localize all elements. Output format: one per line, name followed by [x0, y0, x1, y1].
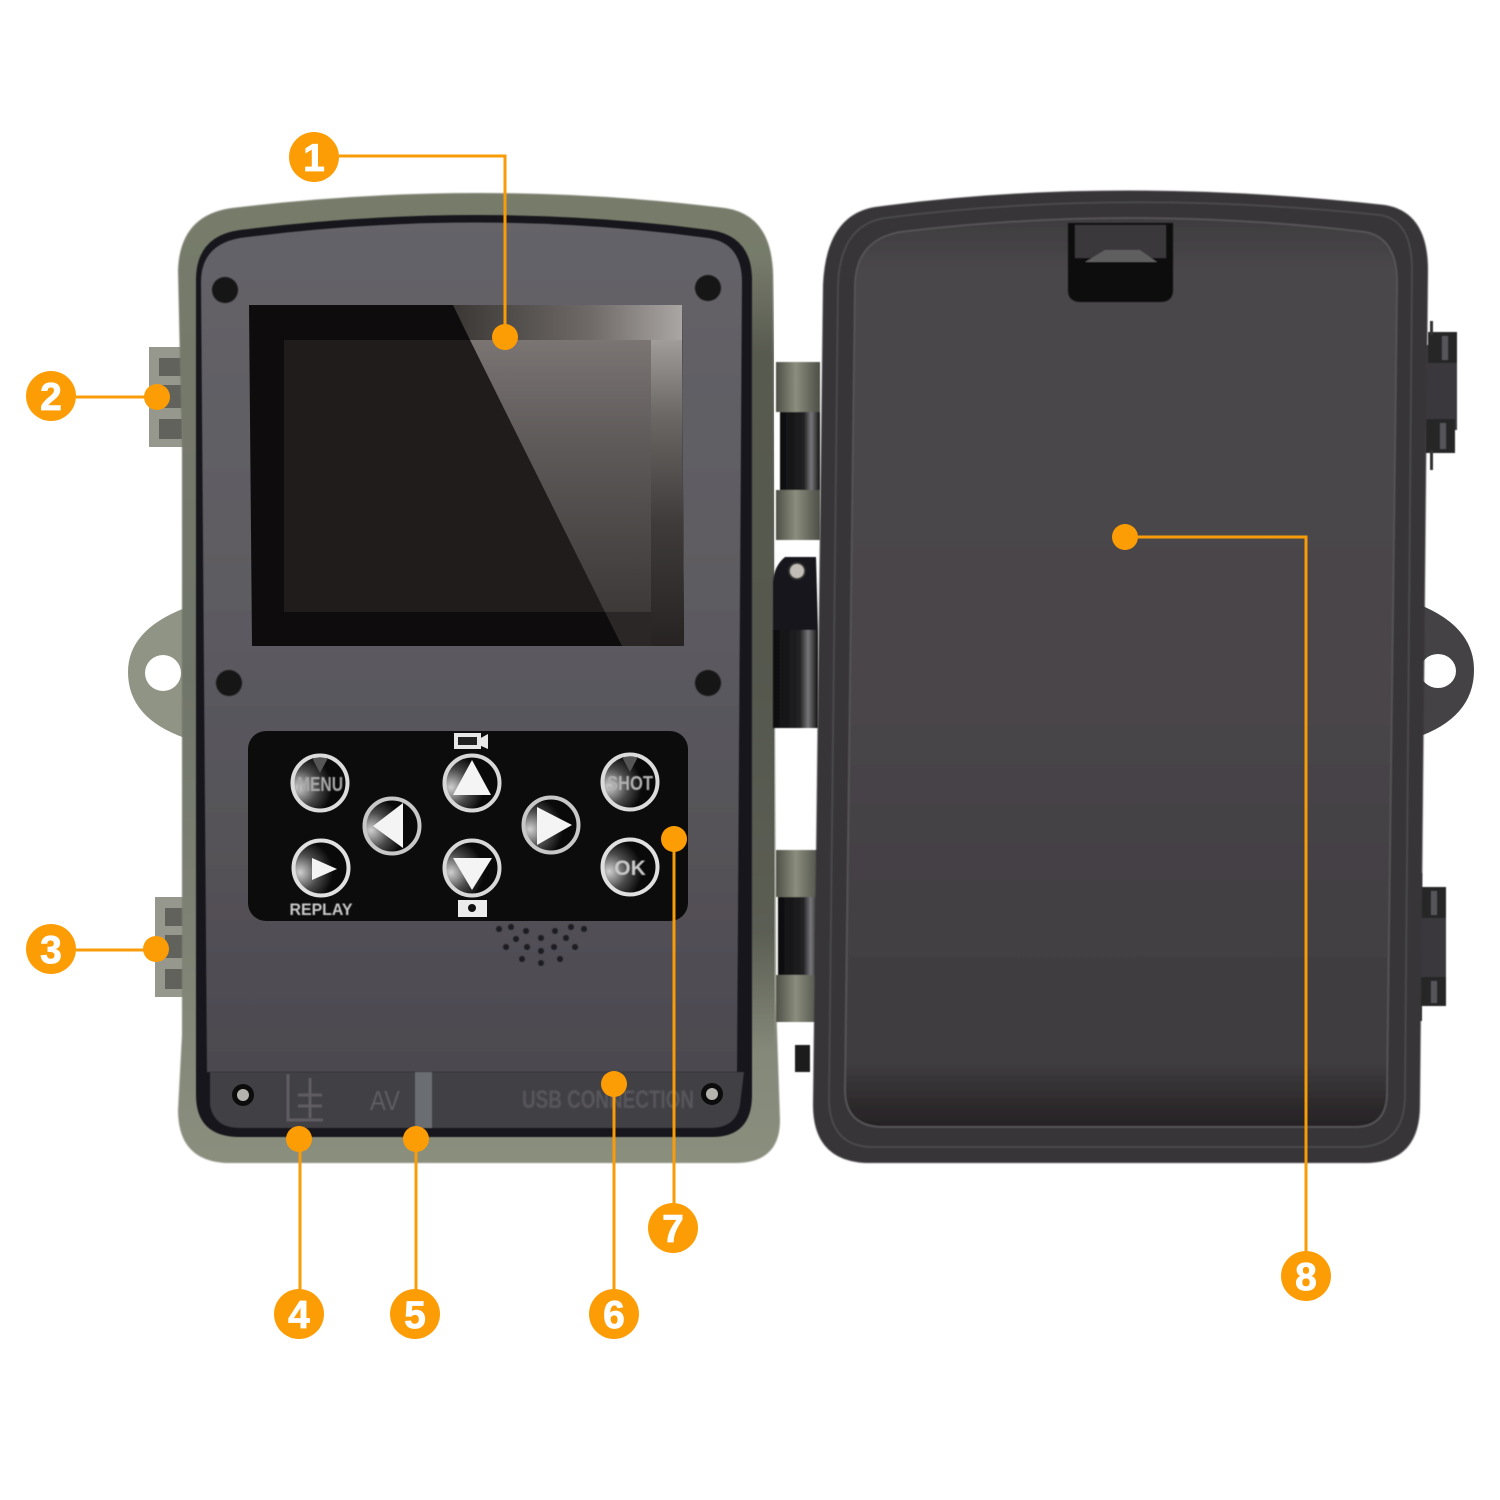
grey inner panel — [201, 222, 742, 1072]
button: right arrow — [524, 798, 578, 852]
hinges — [773, 362, 820, 1072]
callout 2: upper latch: 2 — [40, 376, 62, 419]
callout 2: upper latch — [26, 371, 170, 421]
panel screws — [212, 275, 721, 696]
button: replay — [294, 840, 348, 896]
TF card symbol — [288, 1074, 323, 1120]
LCD screen — [249, 305, 684, 646]
callout 4: card slot — [274, 1126, 324, 1339]
callout 6: USB port — [589, 1071, 639, 1339]
shaded right side of the shell — [752, 260, 774, 1050]
button: ok: OK — [614, 857, 646, 880]
button: ok — [602, 840, 658, 894]
callout 8: battery door — [1112, 524, 1331, 1301]
callout 5: AV port: 5 — [404, 1294, 426, 1337]
icon: video camera — [456, 734, 488, 749]
latch, upper left — [149, 347, 183, 447]
outer door shell — [813, 190, 1428, 1163]
screw, strip right — [701, 1083, 723, 1105]
battery door tab notch — [1068, 223, 1173, 302]
button: shot: SHOT — [607, 773, 653, 795]
callout 1: screen — [289, 132, 518, 350]
mounting ear, right — [1415, 603, 1474, 738]
button: up arrow — [444, 756, 500, 810]
button: shot — [602, 754, 658, 810]
USB connection label: USB CONNECTION — [522, 1086, 694, 1114]
mounting ear, left — [128, 608, 185, 738]
callout 4: card slot: 4 — [288, 1294, 310, 1337]
callout 7: keypad: 7 — [662, 1208, 684, 1251]
icon: photo camera — [458, 900, 487, 917]
callout 3: lower latch — [26, 924, 169, 974]
callout 5: AV port — [390, 1126, 440, 1339]
latch, upper right — [1422, 321, 1457, 470]
callout 1: screen: 1 — [303, 137, 325, 180]
latch, lower right — [1412, 873, 1446, 1021]
inner tray — [845, 218, 1397, 1127]
button: down arrow — [444, 840, 500, 896]
outer rim highlight — [829, 202, 1412, 1147]
callout 3: lower latch: 3 — [40, 929, 62, 972]
replay label: REPLAY — [290, 900, 353, 919]
callout 8: battery door: 8 — [1295, 1256, 1317, 1299]
black gasket — [196, 215, 752, 1137]
keypad — [248, 731, 688, 921]
port cover divider — [415, 1072, 432, 1128]
camera door, right half — [813, 190, 1474, 1163]
outer olive shell — [178, 193, 780, 1163]
AV label: AV — [370, 1085, 400, 1116]
port cover strip — [210, 1072, 744, 1128]
callout 7: keypad — [648, 826, 698, 1253]
button: menu: MENU — [297, 774, 343, 796]
button: menu — [292, 756, 348, 810]
latch, lower left — [155, 897, 189, 997]
speaker holes — [496, 924, 587, 966]
screw, strip left — [232, 1084, 254, 1106]
camera body, left half — [128, 193, 780, 1163]
button: left arrow — [364, 798, 420, 854]
callout 6: USB port: 6 — [603, 1294, 625, 1337]
